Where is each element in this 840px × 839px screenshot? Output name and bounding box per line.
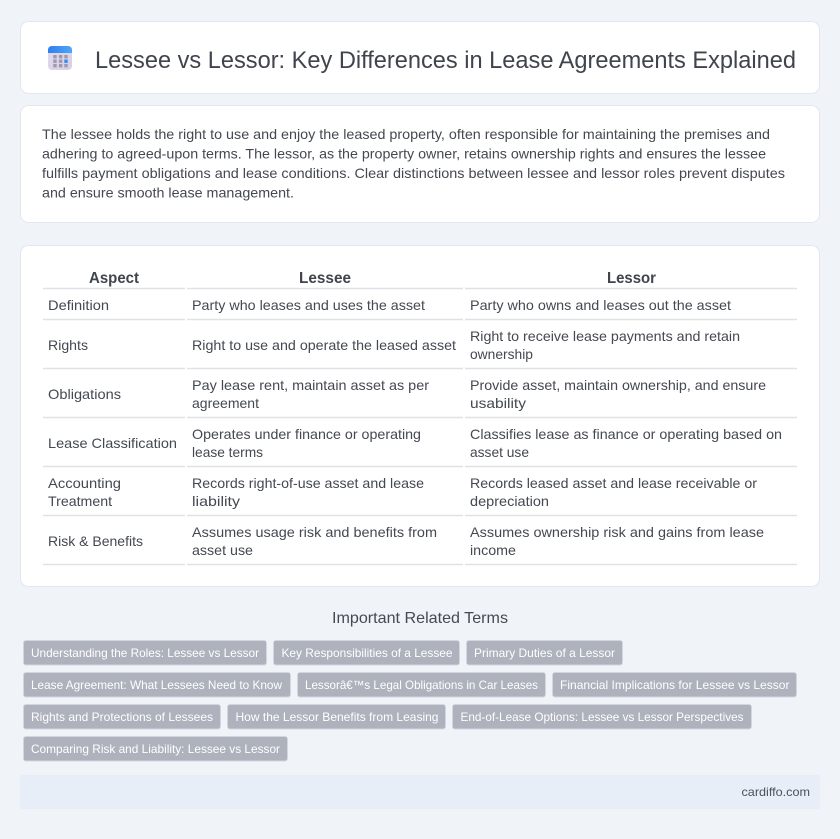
related terms tags: Understanding the Roles: Lessee vs Lessor: [31, 646, 259, 660]
panel: introduction: [20, 106, 820, 222]
row: lease classification: Operates under finance or operating: [192, 426, 421, 442]
row: obligations: agreement: [192, 395, 259, 411]
related terms tags: [24, 640, 796, 761]
related terms tags: Lease Agreement: What Lessees Need to Know: [31, 678, 282, 692]
related terms tags: Lessorâ€™s Legal Obligations in Car Leases: [305, 678, 538, 692]
row: rights: Rights: [48, 337, 88, 353]
related terms tags: End-of-Lease Options: Lessee vs Lessor Perspectives: [460, 710, 744, 724]
row: obligations: Provide asset, maintain ownership, and ensure: [470, 377, 766, 393]
row: risk and benefits: asset use: [192, 542, 253, 558]
footer source: cardiffo.com: [742, 785, 810, 799]
row: definition: Party who owns and leases out the asset: [470, 297, 731, 313]
row: accounting treatment: liability: [192, 493, 240, 509]
icon: calendar: [48, 46, 72, 70]
table header: Lessee: [299, 270, 351, 287]
related terms tags: Primary Duties of a Lessor: [474, 646, 615, 660]
row: risk and benefits: Assumes ownership risk and gains from lease: [470, 524, 764, 540]
row: accounting treatment: [48, 475, 757, 509]
row: obligations: [48, 377, 766, 411]
row: accounting treatment: Treatment: [48, 493, 112, 509]
row: obligations: Obligations: [48, 386, 121, 402]
row: rights: [48, 328, 740, 362]
related terms tags: Financial Implications for Lessee vs Lessor: [560, 678, 790, 692]
row: definition: [48, 297, 731, 313]
intro paragraph: fulfills payment obligations and lease conditions. Clear distinctions between lessee and lessor roles prevent disputes: [42, 165, 785, 181]
related terms tags: How the Lessor Benefits from Leasing: [236, 710, 438, 724]
row: rights: ownership: [470, 346, 533, 362]
panel: title card: [20, 22, 820, 94]
row: obligations: Pay lease rent, maintain asset as per: [192, 377, 429, 393]
intro paragraph: The lessee holds the right to use and enjoy the leased property, often responsible for maintaining the premises and: [42, 126, 770, 142]
row: definition: Party who leases and uses the asset: [192, 297, 425, 313]
table header: Aspect: [89, 270, 140, 287]
row: definition: Definition: [48, 297, 109, 313]
intro paragraph: and ensure smooth lease management.: [42, 184, 294, 200]
intro paragraph: [42, 126, 785, 200]
related terms tags: Key Responsibilities of a Lessee: [282, 646, 453, 660]
row: rights: Right to use and operate the leased asset: [192, 337, 456, 353]
panel: comparison table: [20, 246, 820, 586]
row: obligations: usability: [470, 395, 526, 411]
row: lease classification: [48, 426, 782, 460]
row: lease classification: Classifies lease as finance or operating based on: [470, 426, 782, 442]
row: lease classification: Lease Classification: [48, 435, 177, 451]
title: Lessee vs Lessor: Key Differences in Lease Agreements Explained: [95, 47, 796, 74]
row: accounting treatment: Records right-of-use asset and lease: [192, 475, 424, 491]
row: accounting treatment: Accounting: [48, 475, 121, 491]
footer: [20, 775, 820, 809]
row: accounting treatment: Records leased asset and lease receivable or: [470, 475, 757, 491]
related terms tags: Comparing Risk and Liability: Lessee vs Lessor: [31, 742, 280, 756]
table header: [89, 270, 656, 287]
row: accounting treatment: depreciation: [470, 493, 549, 509]
row: lease classification: lease terms: [192, 444, 263, 460]
row: lease classification: asset use: [470, 444, 529, 460]
row: risk and benefits: income: [470, 542, 516, 558]
heading: important related terms: Important Related Terms: [332, 610, 508, 627]
row: rights: Right to receive lease payments and retain: [470, 328, 740, 344]
related terms tags: Rights and Protections of Lessees: [31, 710, 213, 724]
row: risk and benefits: Assumes usage risk and benefits from: [192, 524, 437, 540]
row: risk and benefits: [48, 524, 764, 558]
row: risk and benefits: Risk & Benefits: [48, 533, 143, 549]
intro paragraph: adhering to agreed-upon terms. The lessor, as the property owner, retains ownership rights and ensures the lessee: [42, 146, 766, 162]
table header: Lessor: [607, 270, 656, 287]
